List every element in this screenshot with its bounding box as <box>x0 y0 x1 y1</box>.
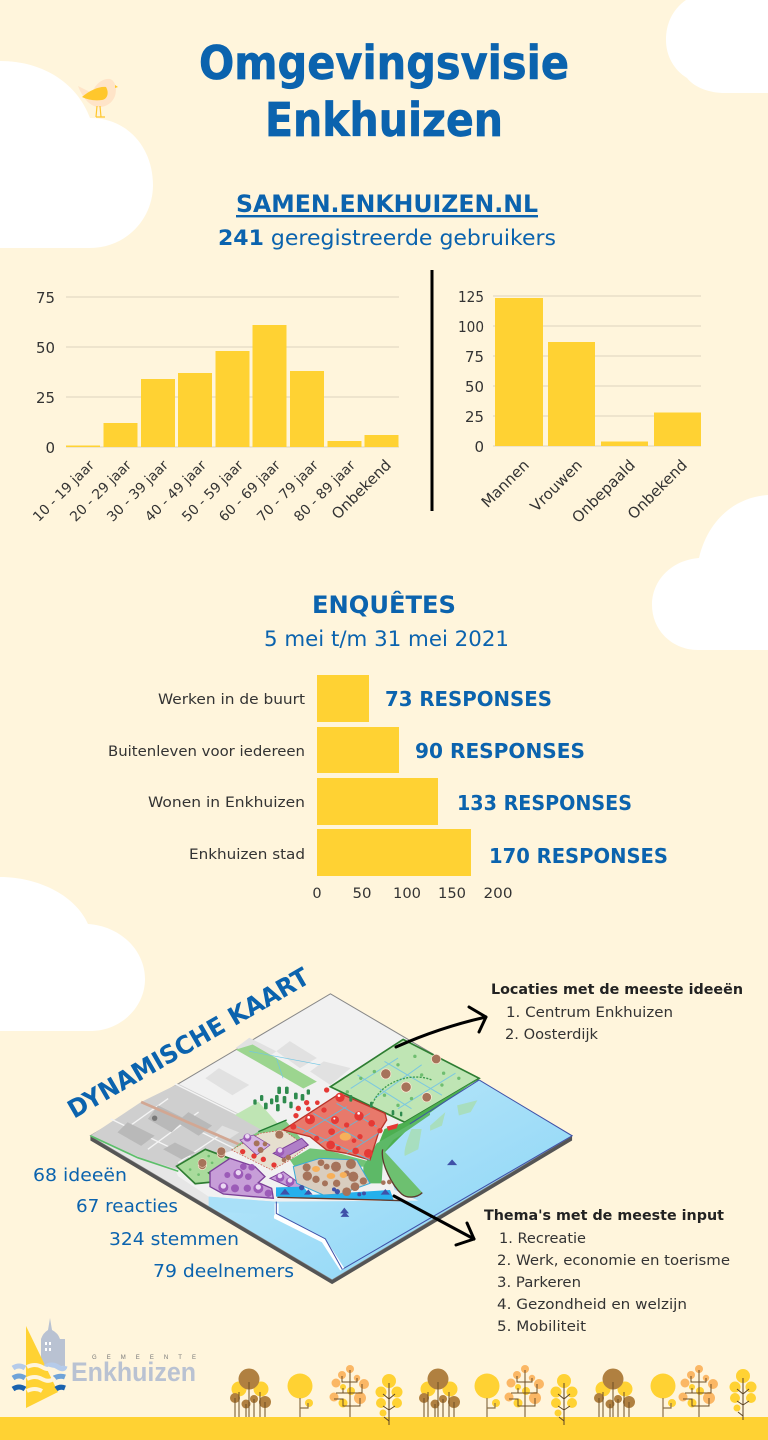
bar chart: gender: Vrouwen <box>527 456 586 515</box>
bar chart: gender: Onbepaald <box>568 456 639 527</box>
logo: gemeente enkhuizen <box>13 1318 196 1408</box>
bar chart: gender: 125 <box>458 288 484 306</box>
text block: themas: 3. Parkeren <box>497 1275 581 1291</box>
bar chart: survey responses <box>108 675 668 902</box>
bar chart: survey responses: 150 <box>438 886 466 902</box>
bar chart: survey responses: Enkhuizen stad <box>189 847 305 863</box>
map centre: town, harbour and purple districts <box>198 1087 430 1213</box>
heading: dynamische kaart: DYNAMISCHE KAART <box>62 962 314 1124</box>
bar chart: survey responses: 73 RESPONSES <box>385 687 552 711</box>
cloud: top right <box>666 0 768 93</box>
bar chart: survey responses: 133 RESPONSES <box>457 791 632 815</box>
bar chart: age groups: 25 <box>36 389 55 407</box>
text block: themas <box>484 1208 730 1335</box>
bar chart: gender: 50 <box>465 378 484 396</box>
bar chart: survey responses: 100 <box>393 886 421 902</box>
bar chart: survey responses: Werken in de buurt <box>158 692 305 708</box>
bar chart: age groups: 75 <box>36 289 55 307</box>
bar chart: age groups: 10 - 19 jaar <box>30 457 98 525</box>
bar chart: gender: Onbekend <box>624 456 691 523</box>
cloud: middle right <box>652 495 768 650</box>
arrow: to locaties <box>396 1007 486 1047</box>
arrow: to themas <box>394 1196 474 1245</box>
title: Enkhuizen <box>265 93 503 147</box>
bar chart: age groups: 0 <box>45 439 55 457</box>
heading: enquetes <box>264 590 509 651</box>
text block: locaties: 1. Centrum Enkhuizen <box>506 1005 673 1021</box>
stats list: 68 ideeën <box>33 1165 127 1186</box>
bar chart: survey responses: 200 <box>484 886 512 902</box>
stats list: 79 deelnemers <box>153 1261 294 1282</box>
bar chart: age groups: Onbekend <box>328 456 395 523</box>
cloud: lower left <box>0 877 145 1031</box>
bar chart: gender: 0 <box>474 438 484 456</box>
trees row <box>230 1365 756 1425</box>
bar chart: age groups: 70 - 79 jaar <box>254 457 322 525</box>
bar chart: survey responses: 0 <box>312 886 322 902</box>
bar chart: survey responses: Buitenleven voor iedereen <box>108 744 305 760</box>
bar chart: age groups: 80 - 89 jaar <box>291 457 359 525</box>
isometric map <box>90 994 572 1284</box>
bar chart: survey responses: 170 RESPONSES <box>489 844 668 868</box>
text block: themas: 1. Recreatie <box>499 1231 586 1247</box>
text block: locaties: Locaties met de meeste ideeën <box>491 982 743 998</box>
bar chart: gender <box>458 288 701 527</box>
bar chart: gender: Mannen <box>478 456 533 511</box>
heading: enquetes: 5 mei t/m 31 mei 2021 <box>264 627 509 651</box>
text block: themas: Thema's met de meeste input <box>484 1208 724 1224</box>
bar chart: age groups: 50 <box>36 339 55 357</box>
stats list: 324 stemmen <box>109 1229 239 1250</box>
text block: locaties: 2. Oosterdijk <box>505 1027 599 1043</box>
bar chart: gender: 75 <box>465 348 484 366</box>
logo: gemeente enkhuizen: GEMEENTE <box>92 1355 196 1361</box>
title <box>199 36 569 147</box>
bar chart: survey responses: 90 RESPONSES <box>415 739 585 763</box>
bar chart: age groups: 40 - 49 jaar <box>142 457 210 525</box>
title: Omgevingsvisie <box>199 36 569 90</box>
bar chart: gender: 25 <box>465 408 484 426</box>
bar chart: survey responses: 50 <box>352 886 372 902</box>
stats list <box>33 1165 294 1282</box>
bar chart: gender: 100 <box>458 318 484 336</box>
bar chart: age groups: 20 - 29 jaar <box>67 457 135 525</box>
icon: bird <box>78 79 118 117</box>
heading: samen.enkhuizen.nl: 241 geregistreerde gebruikers <box>218 226 556 250</box>
logo: gemeente enkhuizen: Enkhuizen <box>71 1357 196 1387</box>
heading: enquetes: ENQUÊTES <box>312 590 456 619</box>
bar chart: survey responses: Wonen in Enkhuizen <box>148 795 305 811</box>
stats list: 67 reacties <box>76 1196 178 1217</box>
heading: samen.enkhuizen.nl <box>218 190 556 250</box>
map base <box>90 994 572 1284</box>
heading: samen.enkhuizen.nl: SAMEN.ENKHUIZEN.NL <box>236 190 538 218</box>
text block: locaties <box>491 982 743 1043</box>
text block: themas: 5. Mobiliteit <box>497 1319 586 1335</box>
text block: themas: 2. Werk, economie en toerisme <box>497 1253 730 1269</box>
text block: themas: 4. Gezondheid en welzijn <box>497 1297 687 1313</box>
bar chart: age groups: 30 - 39 jaar <box>104 457 172 525</box>
divider <box>430 270 434 511</box>
bar chart: age groups <box>30 289 399 525</box>
cloud: top left <box>0 61 153 248</box>
ground strip <box>0 1417 768 1440</box>
bar chart: age groups: 60 - 69 jaar <box>216 457 284 525</box>
bar chart: age groups: 50 - 59 jaar <box>179 457 247 525</box>
